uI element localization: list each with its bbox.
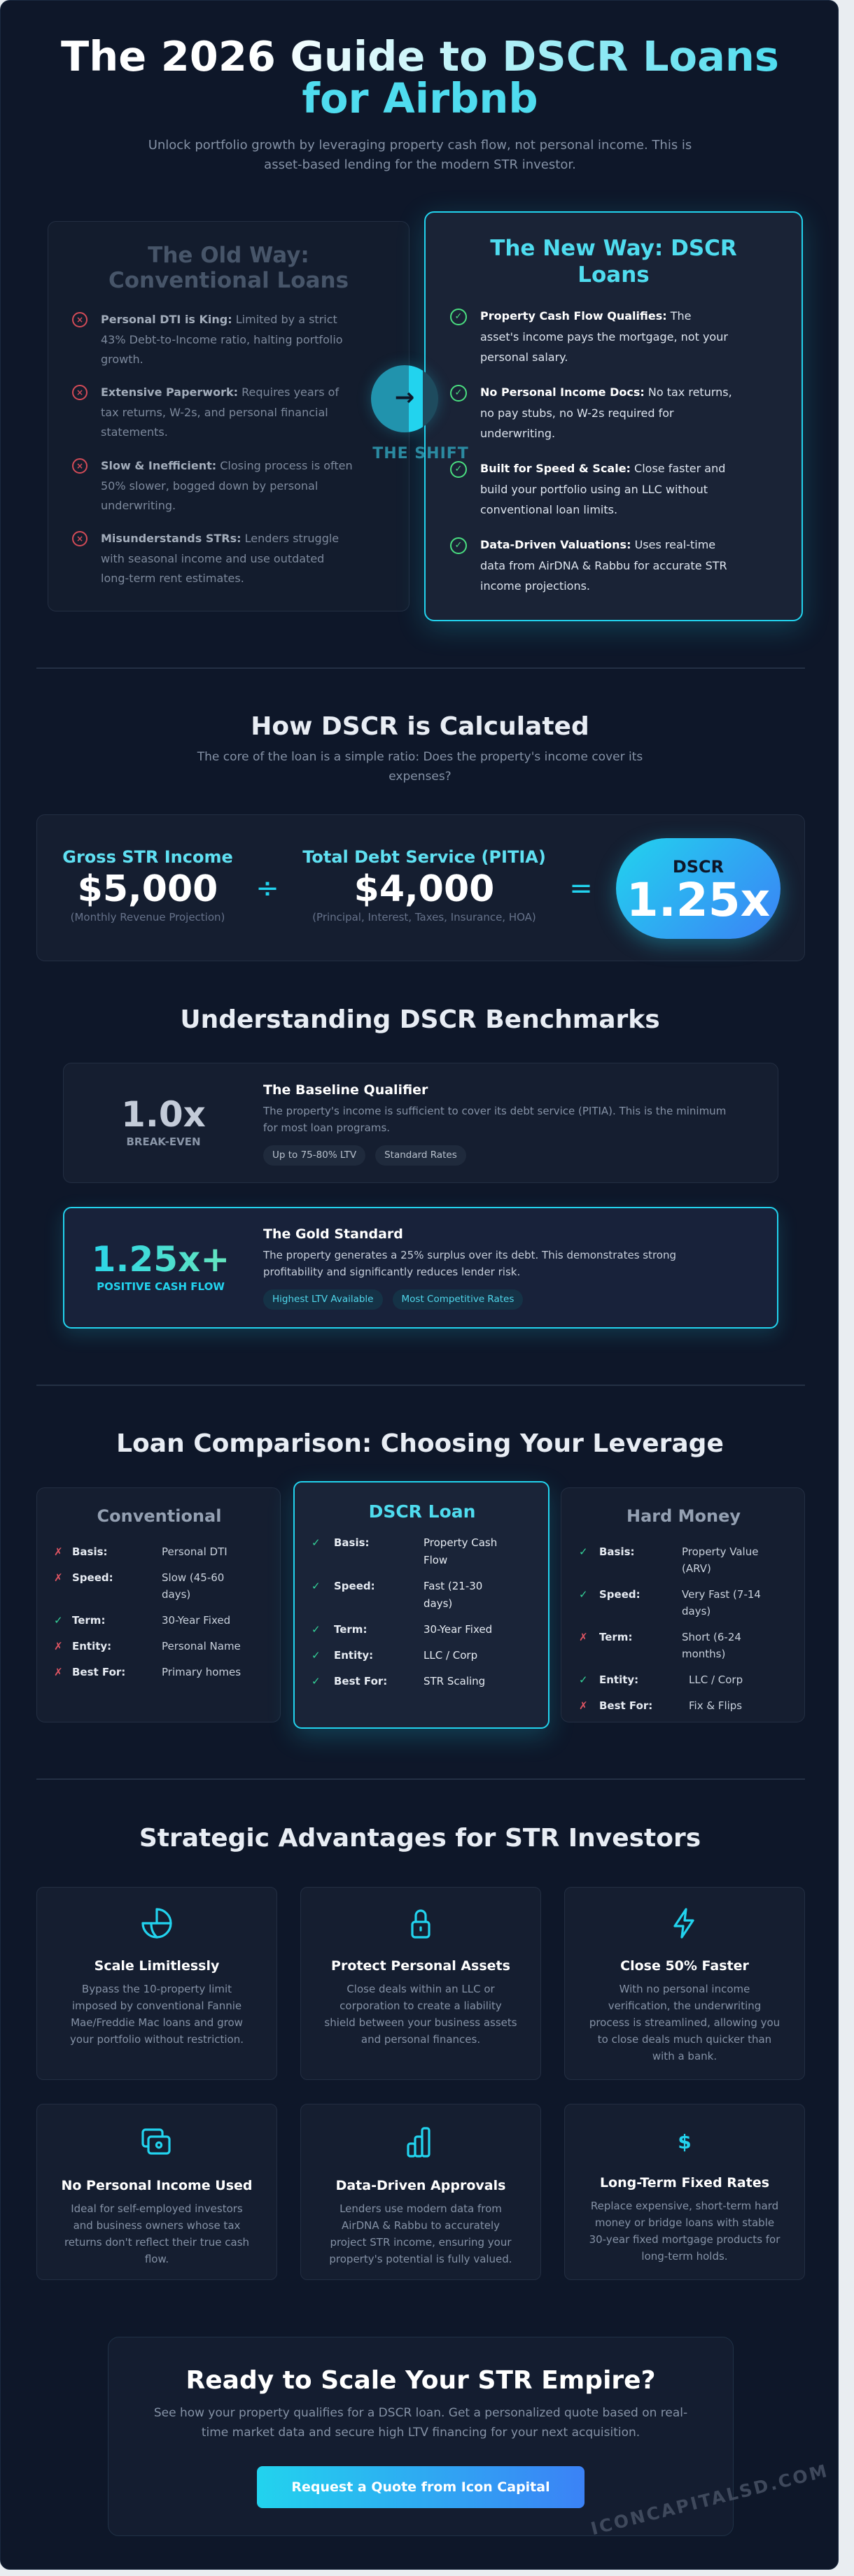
panel: gold standard benchmark — [63, 1207, 778, 1329]
new way items: ✓ — [455, 464, 462, 474]
panel: new way — [424, 211, 803, 621]
panel: dscr loan: LLC / Corp — [424, 1649, 477, 1662]
feature: protect assets — [300, 1887, 541, 2080]
feature: scale limitlessly: imposed by conventional Fannie — [72, 2000, 241, 2012]
text: No Personal Income Docs: No tax returns, — [480, 385, 732, 399]
text: with seasonal income and use outdated — [101, 551, 324, 565]
baseline text: Up to 75-80% LTV — [272, 1149, 356, 1161]
text: underwriting. — [101, 499, 176, 512]
panel: hard money: ✓ — [579, 1673, 588, 1686]
formula: income: (Monthly Revenue Projection) — [71, 911, 225, 923]
cta text — [154, 2406, 687, 2440]
feature: fixed rates: 30-year fixed mortgage products for — [589, 2233, 780, 2246]
title: for Airbnb — [302, 74, 538, 122]
formula: debt: Total Debt Service (PITIA) — [302, 847, 546, 867]
subtitle — [148, 138, 692, 172]
feature: data-driven: AirDNA & Rabbu to accurately — [342, 2219, 500, 2232]
feature: fixed rates: Replace expensive, short-term hard — [591, 2200, 778, 2212]
icon: shift arrow circle: → — [395, 383, 414, 411]
feature: no personal income: returns don't reflect their true cash — [64, 2236, 249, 2249]
old way items — [72, 312, 88, 546]
formula: income: $5,000 — [78, 868, 218, 910]
subtitle: asset-based lending for the modern STR investor. — [264, 157, 576, 172]
panel: hard money: ✗ — [579, 1699, 588, 1712]
new way items: ✓ — [455, 388, 462, 398]
panel: hard money: LLC / Corp — [689, 1673, 743, 1686]
text: no pay stubs, no W-2s required for — [480, 406, 674, 420]
heading: loan comparison: Loan Comparison: Choosing Your Leverage — [116, 1429, 724, 1458]
feature: no personal income: and business owners whose tax — [74, 2219, 240, 2232]
text: conventional loan limits. — [480, 503, 617, 516]
gold text: The property generates a 25% surplus over its debt. This demonstrates strong — [263, 1249, 676, 1261]
panel: call to action — [108, 2337, 734, 2536]
text: Slow & Inefficient: Closing process is often — [101, 459, 353, 472]
panel: dscr loan: Fast (21-30 — [424, 1580, 482, 1592]
panel: hard money: ✓ — [579, 1588, 588, 1601]
panel: dscr loan: ✓ — [312, 1623, 321, 1636]
panel: hard money: Hard Money — [626, 1506, 741, 1526]
panel: hard money: days) — [682, 1605, 710, 1618]
old way items: × — [76, 315, 83, 325]
panel: baseline benchmark — [63, 1063, 778, 1183]
subheading: The core of the loan is a simple ratio: Does the property's income cover its — [197, 750, 643, 764]
feature: protect assets: and personal finances. — [361, 2033, 480, 2046]
feature: close faster: with a bank. — [652, 2050, 717, 2062]
baseline text: The Baseline Qualifier — [263, 1082, 428, 1098]
baseline text — [263, 1082, 726, 1166]
text: long-term rent estimates. — [101, 572, 244, 585]
text: Data-Driven Valuations: Uses real-time — [480, 538, 715, 551]
panel: dscr loan — [293, 1481, 550, 1729]
feature: scale limitlessly: your portfolio without restriction. — [70, 2033, 244, 2046]
baseline text: Standard Rates — [384, 1149, 457, 1161]
text: personal salary. — [480, 351, 568, 364]
cta text: time market data and secure high LTV financing for your next acquisition. — [202, 2426, 640, 2440]
panel: dscr loan: Property Cash — [424, 1536, 497, 1549]
feature: protect assets: Protect Personal Assets — [331, 1958, 510, 1974]
text: Property Cash Flow Qualifies: The — [480, 309, 691, 323]
text: 43% Debt-to-Income ratio, halting portfolio — [101, 333, 343, 346]
feature: data-driven: Data-Driven Approvals — [336, 2178, 505, 2193]
panel: hard money: Best For: — [599, 1699, 652, 1712]
feature: protect assets: Close deals within an LLC or — [346, 1983, 495, 1995]
watermark: ICONCAPITALSD.COM — [589, 2461, 831, 2539]
panel: hard money — [561, 1487, 805, 1722]
text: asset's income pays the mortgage, not your — [480, 330, 728, 343]
gold text: The Gold Standard — [263, 1226, 403, 1242]
text: Extensive Paperwork: Requires years of — [101, 385, 339, 399]
title — [61, 32, 779, 122]
panel: dscr loan: Basis: — [334, 1536, 370, 1549]
new way items — [450, 309, 467, 554]
panel: hard money: Speed: — [599, 1588, 640, 1601]
feature: scale limitlessly: Scale Limitlessly — [94, 1958, 219, 1974]
dscr result pill: DSCR — [673, 857, 724, 877]
icon: shift arrow circle — [371, 365, 438, 432]
panel: hard money: Very Fast (7-14 — [682, 1588, 761, 1601]
text: build your portfolio using an LLC without — [480, 483, 708, 495]
panel: conventional — [36, 1487, 281, 1722]
panel: conventional: Basis: — [72, 1545, 108, 1558]
formula: debt — [302, 847, 546, 923]
panel: conventional: Speed: — [72, 1571, 113, 1584]
panel: hard money: months) — [682, 1648, 725, 1660]
subtitle: Unlock portfolio growth by leveraging property cash flow, not personal income. This is — [148, 138, 692, 153]
ratio 1.0x: 1.0x — [121, 1094, 206, 1135]
panel: old way — [48, 221, 410, 611]
panel: conventional: ✗ — [54, 1545, 63, 1558]
gold text: profitability and significantly reduces lender risk. — [263, 1266, 520, 1278]
panel: hard money: (ARV) — [682, 1562, 711, 1575]
text: income projections. — [480, 579, 590, 593]
panel: hard money: Term: — [599, 1631, 632, 1643]
ratio 1.25x+: POSITIVE CASH FLOW — [97, 1280, 225, 1293]
panel: conventional: Primary homes — [162, 1666, 241, 1678]
panel: dscr loan: STR Scaling — [424, 1675, 485, 1687]
panel: hard money: Property Value — [682, 1545, 758, 1558]
panel: hard money: Short (6-24 — [682, 1631, 741, 1643]
text: Personal DTI is King: Limited by a strict — [101, 313, 337, 326]
new way items: ✓ — [455, 311, 462, 322]
panel: dscr loan: Best For: — [334, 1675, 387, 1687]
panel: dscr loan: Term: — [334, 1623, 367, 1636]
cta button — [257, 2466, 584, 2508]
feature: close faster: With no personal income — [620, 1983, 750, 1995]
panel: dscr loan: ✓ — [312, 1580, 321, 1592]
icon: cash — [141, 2128, 171, 2155]
icon: dollar: $ — [678, 2130, 692, 2153]
panel: hard money: Fix & Flips — [689, 1699, 742, 1712]
text: Built for Speed & Scale: Close faster and — [480, 462, 725, 475]
old way title: The Old Way: — [148, 243, 309, 268]
divide sign: ÷ — [255, 872, 279, 905]
gold text: Most Competitive Rates — [402, 1294, 514, 1305]
panel: dscr loan: Entity: — [334, 1649, 373, 1662]
new way title — [490, 236, 737, 288]
cta text: See how your property qualifies for a DSCR loan. Get a personalized quote based on real- — [154, 2406, 687, 2420]
title: The 2026 Guide to DSCR Loans — [61, 32, 779, 80]
cta heading: Ready to Scale Your STR Empire? — [186, 2366, 655, 2395]
panel: dscr loan: ✓ — [312, 1536, 321, 1549]
old way title — [108, 243, 349, 293]
baseline text: for most loan programs. — [263, 1121, 390, 1134]
panel: conventional: Term: — [72, 1614, 105, 1627]
panel: conventional: ✗ — [54, 1640, 63, 1653]
panel: hard money: Basis: — [599, 1545, 635, 1558]
new way items: ✓ — [455, 540, 462, 551]
heading: strategic advantages: Strategic Advantages for STR Investors — [139, 1824, 701, 1853]
panel: dscr loan: 30-Year Fixed — [424, 1623, 492, 1636]
new way title: Loans — [578, 262, 650, 288]
old way items: × — [76, 388, 83, 397]
text: statements. — [101, 425, 168, 439]
feature: no personal income: Ideal for self-employed investors — [71, 2202, 243, 2215]
feature: fixed rates: Long-Term Fixed Rates — [600, 2175, 769, 2191]
icon: pie chart — [141, 1908, 172, 1939]
feature: fixed rates: long-term holds. — [641, 2250, 728, 2263]
feature: data-driven — [300, 2104, 541, 2280]
equals sign: = — [569, 872, 593, 905]
ratio 1.0x: BREAK-EVEN — [126, 1135, 201, 1148]
panel: conventional: ✗ — [54, 1666, 63, 1678]
panel: hard money: Entity: — [599, 1673, 638, 1686]
feature: scale limitlessly: Mae/Freddie Mac loans and grow — [71, 2016, 243, 2029]
feature: scale limitlessly: Bypass the 10-property limit — [82, 1983, 232, 1995]
panel: hard money: ✓ — [579, 1545, 588, 1558]
baseline text: The property's income is sufficient to cover its debt service (PITIA). This is the minimum — [263, 1105, 726, 1117]
heading: how dscr calculated: How DSCR is Calculated — [251, 712, 589, 741]
feature: close faster: process is streamlined, allowing you — [589, 2016, 780, 2029]
ratio 1.25x+: 1.25x+ — [92, 1239, 230, 1280]
formula: debt: (Principal, Interest, Taxes, Insurance, HOA) — [312, 911, 536, 923]
text: tax returns, W-2s, and personal financial — [101, 406, 328, 418]
feature: no personal income: No Personal Income Used — [61, 2178, 253, 2193]
panel: conventional: 30-Year Fixed — [162, 1614, 230, 1627]
panel: conventional: Personal DTI — [162, 1545, 227, 1558]
panel: conventional: Entity: — [72, 1640, 111, 1653]
subheading — [197, 750, 643, 784]
feature: close faster: Close 50% Faster — [620, 1958, 749, 1974]
panel: conventional: Personal Name — [162, 1640, 241, 1653]
old way items: × — [76, 461, 83, 471]
gold text: Highest LTV Available — [272, 1294, 374, 1305]
panel: conventional: Conventional — [97, 1506, 221, 1526]
gold text — [263, 1226, 676, 1310]
text: data from AirDNA & Rabbu for accurate STR — [480, 558, 727, 572]
text: Misunderstands STRs: Lenders struggle — [101, 532, 339, 545]
text: underwriting. — [480, 427, 555, 440]
feature: no personal income: flow. — [145, 2253, 169, 2265]
feature: close faster — [564, 1887, 805, 2080]
feature: protect assets: shield between your business assets — [324, 2016, 517, 2029]
feature: fixed rates — [564, 2104, 805, 2280]
panel: dscr loan: Speed: — [334, 1580, 375, 1592]
panel: hard money: ✗ — [579, 1631, 588, 1643]
panel: conventional: Slow (45-60 — [162, 1571, 224, 1584]
feature: fixed rates: money or bridge loans with stable — [595, 2216, 774, 2229]
formula: income — [62, 847, 233, 923]
old way title: Conventional Loans — [108, 268, 349, 293]
text: 50% slower, bogged down by personal — [101, 479, 318, 493]
feature: close faster: verification, the underwriting — [608, 2000, 761, 2012]
panel: conventional: ✓ — [54, 1614, 63, 1627]
cta button: Request a Quote from Icon Capital — [291, 2479, 550, 2495]
formula: income: Gross STR Income — [62, 847, 233, 867]
panel: dscr loan: days) — [424, 1597, 452, 1610]
subheading: expenses? — [388, 770, 451, 784]
panel: dscr loan: ✓ — [312, 1649, 321, 1662]
new way title: The New Way: DSCR — [490, 236, 737, 261]
feature: protect assets: corporation to create a liability — [340, 2000, 502, 2012]
panel: formula — [36, 814, 805, 961]
text: growth. — [101, 353, 144, 366]
old way items: × — [76, 534, 83, 544]
panel: conventional: Best For: — [72, 1666, 125, 1678]
panel: dscr loan: ✓ — [312, 1675, 321, 1687]
panel: dscr loan: Flow — [424, 1554, 447, 1566]
feature: no personal income — [36, 2104, 277, 2280]
panel: conventional: ✗ — [54, 1571, 63, 1584]
feature: data-driven: Lenders use modern data from — [340, 2202, 502, 2215]
feature: close faster: to close deals much quicker than — [598, 2033, 771, 2046]
formula: debt: $4,000 — [354, 868, 494, 910]
dscr result pill: 1.25x — [626, 873, 770, 927]
feature: data-driven: project STR income, ensuring your — [330, 2236, 512, 2249]
feature: data-driven: property's potential is fully valued. — [329, 2253, 512, 2265]
icon: lightning — [673, 1908, 694, 1939]
feature: scale limitlessly — [36, 1887, 277, 2080]
shift label: THE SHIFT — [372, 445, 469, 462]
icon: lock — [411, 1909, 430, 1939]
panel: dscr loan: DSCR Loan — [369, 1501, 475, 1522]
heading: benchmarks: Understanding DSCR Benchmarks — [180, 1005, 660, 1034]
panel: conventional: days) — [162, 1588, 190, 1601]
icon: bar chart — [407, 2127, 430, 2158]
dscr result pill — [616, 838, 780, 939]
